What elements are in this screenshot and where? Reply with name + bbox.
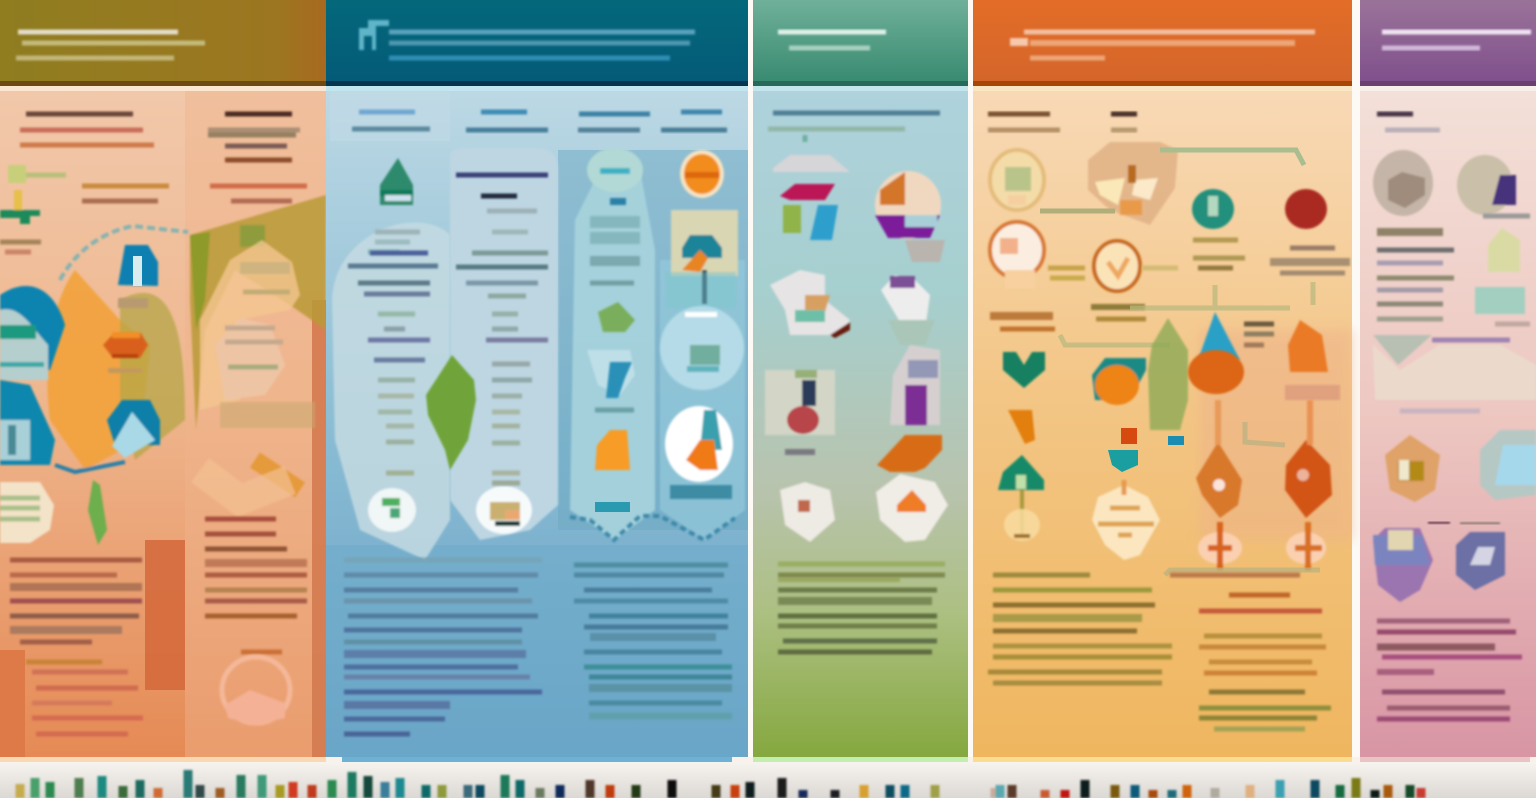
icon: cream hex badge <box>1092 480 1160 560</box>
text block: column 2 capsule labels <box>348 175 640 483</box>
icon: blue scene <box>1480 430 1536 500</box>
connector: green route <box>1160 150 1304 165</box>
icon: green tree overlay <box>1148 318 1188 430</box>
icon: amber badge <box>1385 435 1440 502</box>
icon: header mark <box>359 20 389 50</box>
circle: ring and orange glow <box>47 226 188 472</box>
icon: pale green card <box>1475 287 1525 314</box>
connector: pale lower <box>1165 422 1320 575</box>
text block: column 2 headings <box>352 112 727 130</box>
icon: white figure <box>881 275 935 345</box>
icon: white badge plate <box>476 486 532 534</box>
icon: blue cone <box>1198 312 1240 360</box>
text block: column 1 lower left <box>10 560 143 734</box>
text block: column 5 label <box>1428 522 1500 524</box>
icon: white plate right <box>876 474 948 542</box>
icon: teal building <box>0 380 55 465</box>
icon: blue house <box>107 400 160 458</box>
icon: pale lantern <box>1488 228 1520 272</box>
icon: green small leaf <box>598 302 635 332</box>
illustration: pale triangle landscape <box>1373 335 1536 411</box>
icon: stone circle <box>1373 150 1433 216</box>
text block: column 4 lower right <box>1170 575 1331 729</box>
icon: tan card with teal house <box>666 210 738 308</box>
icon: green tree badge <box>998 455 1044 541</box>
circle: orange check badge <box>1094 241 1140 291</box>
icon: blue shield right <box>1456 532 1505 590</box>
icon: white door <box>133 256 142 286</box>
icon: blue purple shield left <box>1373 528 1433 602</box>
icon: red jar <box>765 370 835 435</box>
connector: pale routes <box>1060 282 1313 345</box>
text block: column 3 lower <box>778 452 945 652</box>
icon: blue arch <box>118 245 158 286</box>
icon: orange carrot <box>595 430 630 470</box>
icon: purple figure <box>890 345 940 425</box>
icon: teal tag <box>595 502 630 512</box>
circle: green ring badge <box>990 150 1044 210</box>
icon: white globe with orange figure <box>665 406 733 499</box>
icon: teal small <box>1108 450 1138 472</box>
icon: orange hat <box>877 435 942 472</box>
figures: row of small people left <box>20 770 750 798</box>
panel: column 4 amber <box>973 0 1352 757</box>
header: column 2 <box>326 0 748 91</box>
icon: green heart shield <box>1003 352 1045 388</box>
icon: white bird and bowl <box>770 270 850 338</box>
text block: column 4 lower left <box>988 575 1172 683</box>
header: column 1 <box>0 0 326 91</box>
circle: orange white badge <box>990 222 1044 288</box>
icon: teal big circle <box>0 286 65 380</box>
icon: tan hub and wings <box>1088 142 1178 225</box>
icon: green sprout <box>88 480 107 545</box>
icon: green leaf <box>426 355 476 470</box>
callout: right badges <box>200 240 315 500</box>
icon: white plate left <box>780 482 835 542</box>
panel: column 2 blue <box>326 0 748 757</box>
header: column 3 <box>753 0 968 91</box>
header: column 4 <box>973 0 1352 91</box>
text block: column 5 heading <box>1377 114 1440 130</box>
icon: magenta plate <box>773 155 850 240</box>
icon: teal gem <box>1192 189 1234 229</box>
text block: column 5 middle <box>1377 216 1530 324</box>
card: tall capsule 2 <box>450 148 558 540</box>
icon: faded globe <box>222 657 290 725</box>
header: column 5 <box>1360 0 1536 91</box>
icon: orange flame <box>1285 320 1340 400</box>
icon: blue drop <box>606 362 632 398</box>
icon: pale globe <box>660 306 744 390</box>
icon: burger <box>103 298 148 373</box>
text block: column 2 lower right <box>574 565 732 716</box>
icon: blue shield <box>587 350 635 395</box>
text block: column 5 lower <box>1377 621 1522 719</box>
icon: orange arrow <box>1008 410 1035 444</box>
icon: red gem <box>1285 189 1327 229</box>
panel: column 1 orange <box>0 0 326 757</box>
text block: column 4 headings <box>988 114 1137 130</box>
callout: left pale badge <box>0 482 54 543</box>
icon: orange drops right <box>1196 400 1332 518</box>
icon: white badge green <box>368 488 416 532</box>
icon: tan circle with purple <box>1457 155 1516 215</box>
figures: row of small people right <box>782 778 1421 798</box>
icon: green tree <box>380 158 413 205</box>
connector: mid route <box>1040 208 1115 214</box>
decoration: pointed tabs <box>570 516 735 540</box>
panel: column 5 pink <box>1360 0 1536 757</box>
text block: column 1 lower right <box>205 519 307 652</box>
text block: column 1 heading left <box>0 114 169 252</box>
text block: column 2 lower left <box>344 560 542 734</box>
icon: red tag <box>1121 428 1137 444</box>
card: tall capsule 1 <box>332 223 450 560</box>
text block: column 4 mid labels <box>990 240 1350 345</box>
card: tall capsule 3 <box>570 170 655 540</box>
panel: bottom strip of figures <box>0 757 1536 798</box>
illustration: olive hills <box>190 195 326 430</box>
icon: orange purple sphere <box>875 171 945 262</box>
icon: blue small <box>1168 436 1184 445</box>
icon: orange teal gem <box>1092 358 1146 405</box>
icon: teal lantern <box>587 148 643 205</box>
card: tall capsule 4 <box>660 260 745 540</box>
text block: column 3 heading <box>768 113 940 142</box>
icon: orange pins lower <box>1198 522 1326 570</box>
icon: seedling top-left <box>0 165 66 224</box>
text block: column 1 heading right <box>208 114 307 201</box>
icon: orange bulb <box>1188 350 1244 394</box>
icon: orange balloon <box>680 150 724 198</box>
panel: column 3 green <box>753 0 968 757</box>
